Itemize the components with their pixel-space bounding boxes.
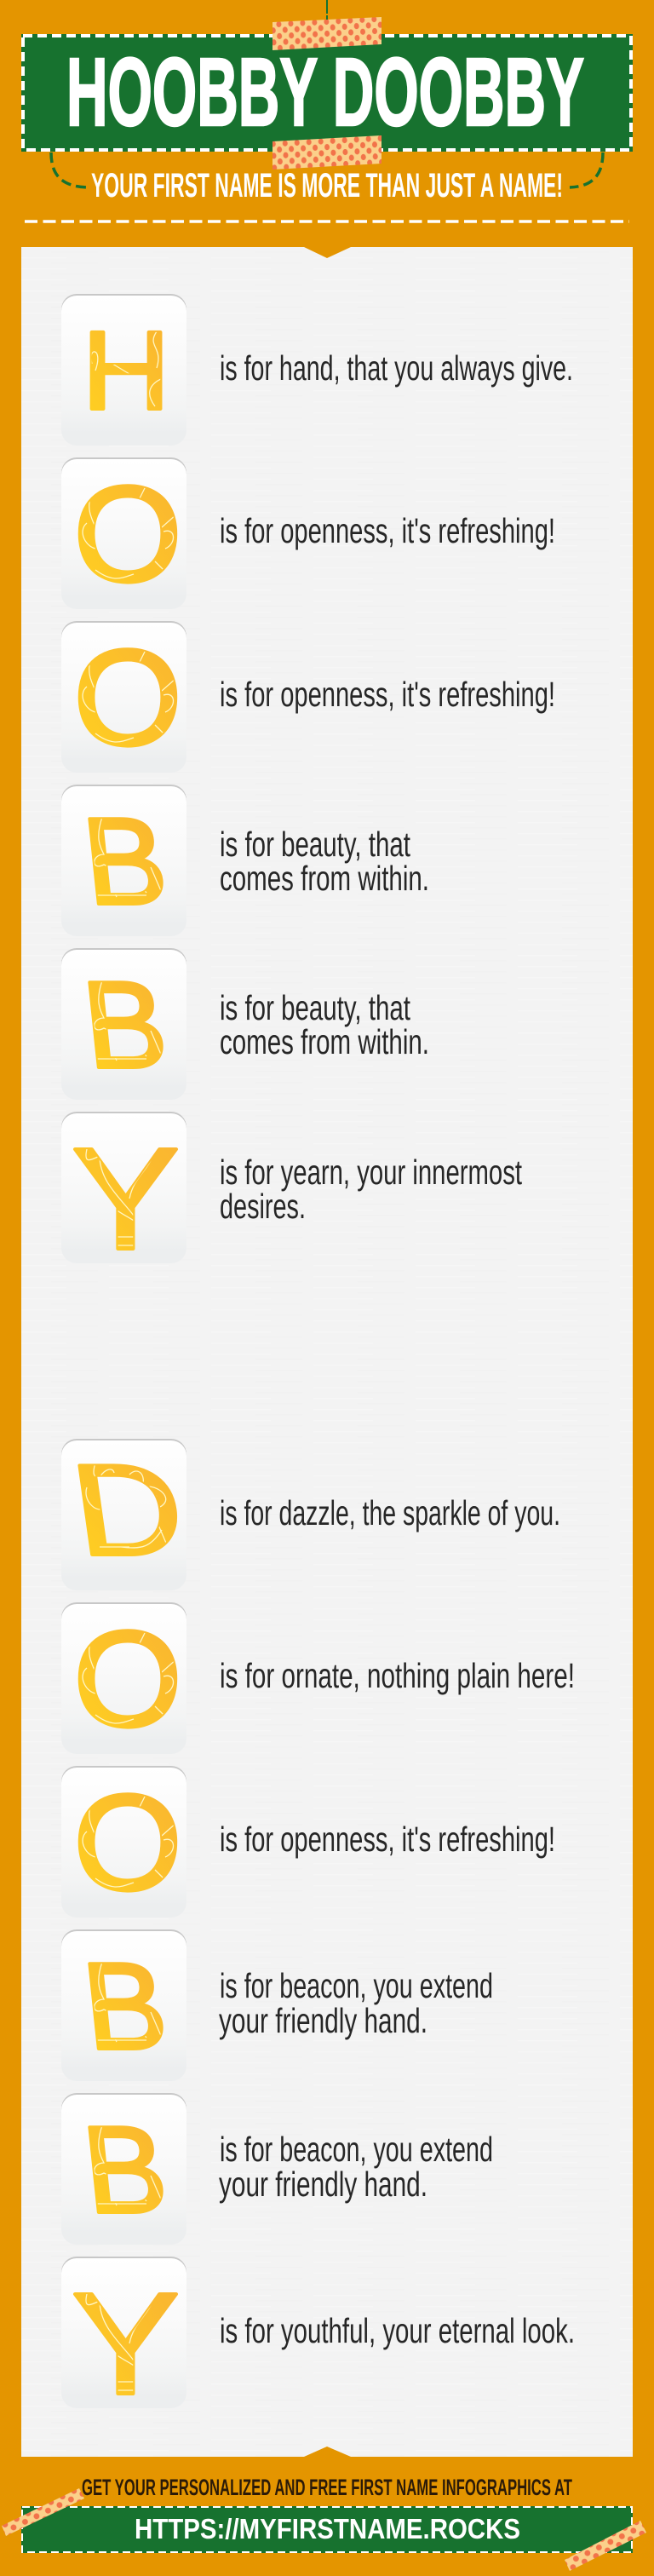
dashed connector left [51, 152, 88, 187]
icon: letter O: O [73, 1766, 182, 1918]
row: Y [61, 1112, 522, 1256]
row: O [61, 1766, 555, 1918]
icon: letter B: B [77, 791, 173, 930]
row: B [61, 785, 429, 936]
row: Y [61, 2257, 572, 2407]
row: B [61, 1929, 493, 2081]
icon: letter B: B [77, 955, 173, 1094]
dashed connector right [570, 152, 603, 187]
row: B [61, 2093, 493, 2245]
row: O [61, 621, 555, 773]
icon: letter O: O [73, 457, 182, 610]
row: B [61, 948, 429, 1100]
row: O [61, 457, 555, 610]
icon: letter H: H [82, 308, 170, 433]
tape: bottom [272, 135, 382, 170]
row: O [61, 1602, 575, 1755]
row: D [61, 1439, 560, 1590]
header hanging line [326, 0, 328, 20]
footer url: HTTPS://MYFIRSTNAME.ROCKS [135, 2513, 520, 2544]
icon: letter O: O [73, 621, 182, 773]
dashed divider [25, 220, 629, 223]
row: H [61, 294, 573, 446]
row text: is for beauty, that [220, 825, 410, 864]
row text: is for beauty, that [220, 988, 410, 1027]
footer banner [21, 2506, 633, 2553]
tape: footer left [2, 2488, 84, 2536]
tape: footer right [565, 2521, 646, 2571]
row text: is for yearn, your innermost [220, 1153, 522, 1192]
icon: letter O: O [73, 1602, 182, 1755]
row text: is for beacon, you extend [220, 2130, 493, 2169]
row: Y: desires. [220, 1187, 306, 1226]
row: B: comes from within. [220, 859, 429, 898]
title banner [21, 34, 633, 152]
icon: letter B: B [77, 1936, 173, 2075]
icon: letter Y: Y [72, 1118, 180, 1280]
icon: letter B: B [77, 2100, 173, 2239]
icon: letter Y: Y [72, 2263, 180, 2425]
row: B: your friendly hand. [219, 2001, 427, 2040]
row: B: comes from within. [220, 1022, 429, 1061]
row: B: your friendly hand. [219, 2165, 427, 2204]
tape: top [272, 17, 382, 50]
icon: letter D: D [64, 1439, 192, 1583]
row text: is for beacon, you extend [220, 1966, 493, 2005]
